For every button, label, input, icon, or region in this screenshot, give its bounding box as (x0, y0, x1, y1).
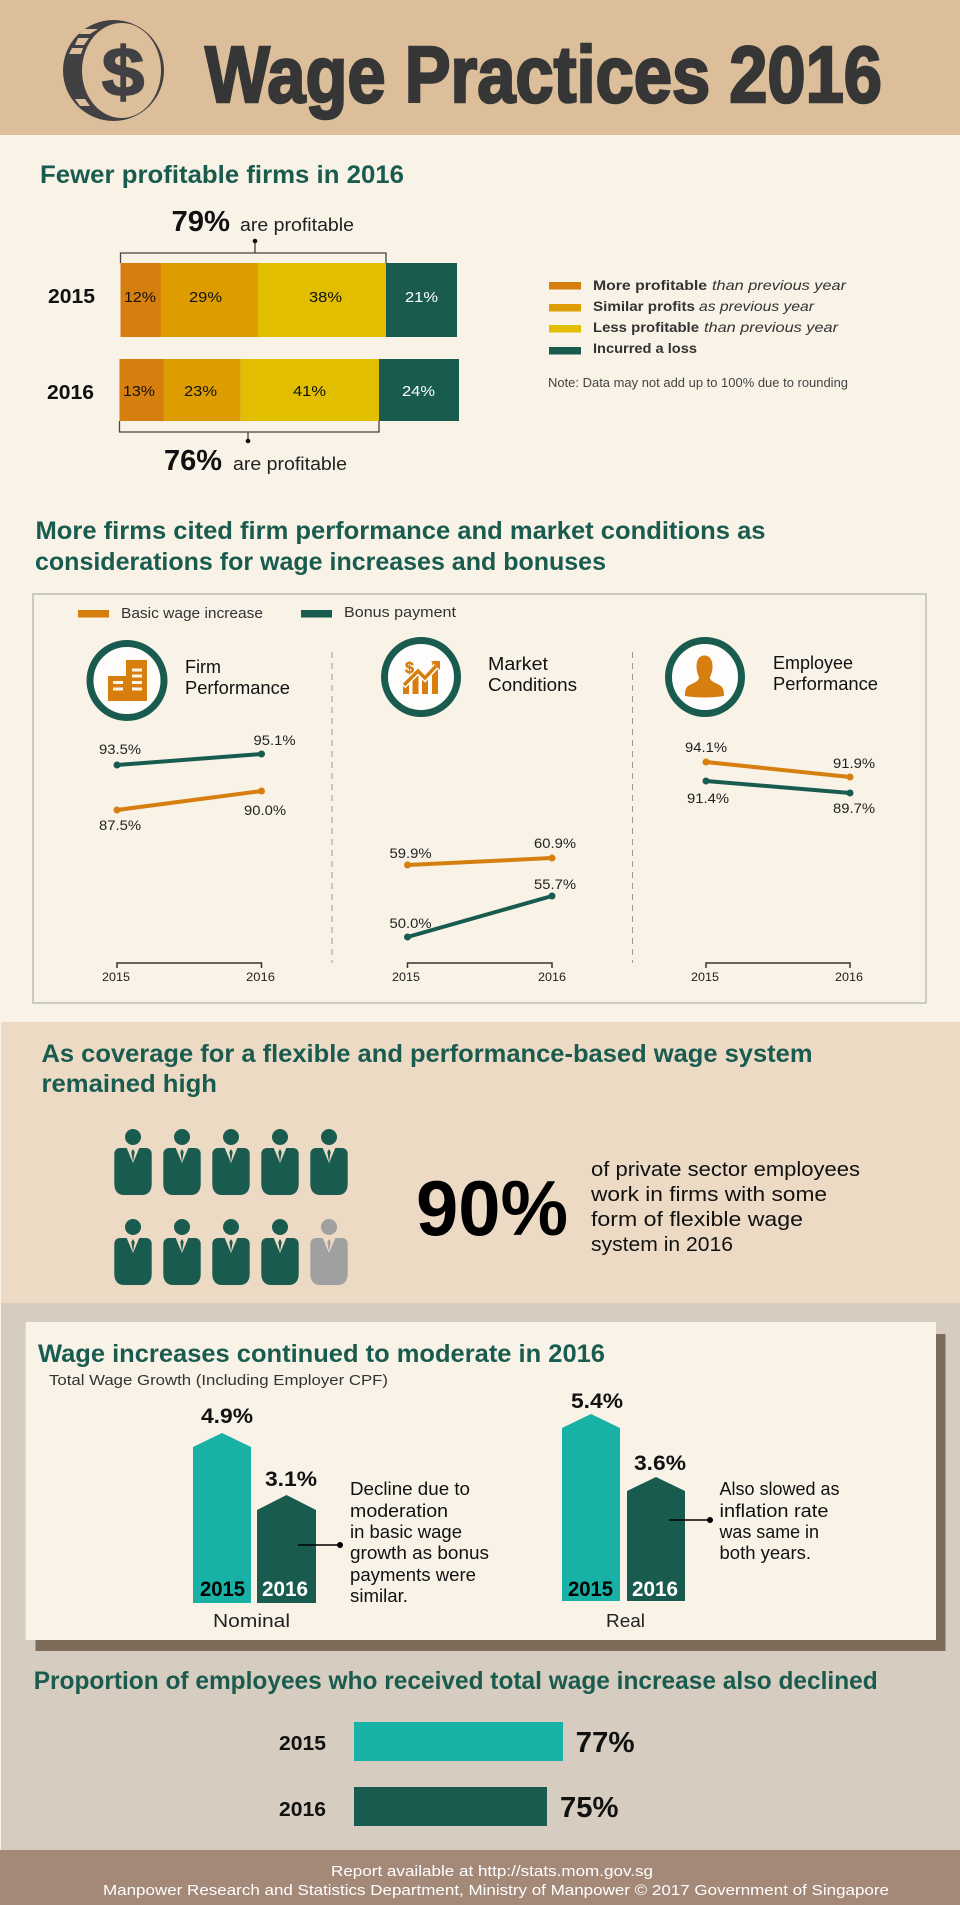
line chart: market conditions: 2015 (392, 970, 420, 984)
line chart: market conditions: 60.9% (534, 835, 576, 851)
icon: rising bar chart with dollar (384, 640, 458, 714)
heading: flexible wage coverage: remained high (42, 1070, 217, 1098)
chart: real wage growth: 2015 (568, 1578, 613, 1601)
heading: wage increases: Wage increases continued to moderate in 2016 (38, 1340, 605, 1368)
callout: real explanation: both years. (720, 1543, 811, 1563)
footer: Manpower Research and Statistics Department, Ministry of Manpower © 2017 Government of Singapore (103, 1882, 889, 1899)
sub-panel: firm performance (90, 644, 296, 984)
legend: profitability (549, 277, 848, 356)
sub-panel: employee performance: Employee (773, 653, 853, 673)
note: Note: Data may not add up to 100% due to rounding (548, 376, 848, 390)
text: 90% description: of private sector employees (591, 1158, 860, 1181)
chart: real wage growth: Real (606, 1611, 645, 1631)
footer: Report available at http://stats.mom.gov.sg (331, 1863, 653, 1880)
line chart: firm performance (99, 732, 296, 984)
legend: profitability: Incurred a loss (593, 340, 697, 356)
legend: lines: Basic wage increase (121, 605, 263, 622)
line chart: employee performance: 91.4% (687, 790, 729, 806)
text: 90% description: work in firms with some (590, 1183, 827, 1206)
text: 90% description (590, 1158, 860, 1256)
heading: flexible wage coverage (42, 1040, 812, 1098)
panel: wage increases (26, 1322, 945, 1651)
icon: person bust (668, 640, 742, 714)
bar 2016: 41% (293, 383, 326, 400)
callout: real explanation (669, 1479, 840, 1563)
sub-panel: employee performance (668, 640, 878, 984)
bar chart: proportion of employees: 2016 (279, 1799, 326, 1821)
chart: real wage growth: 3.6% (634, 1452, 686, 1475)
heading: wage considerations: considerations for wage increases and bonuses (35, 548, 606, 576)
chart: real wage growth: 2016 (632, 1578, 678, 1601)
legend: profitability: than previous year (704, 319, 840, 335)
legend: profitability: Less profitable (593, 319, 699, 335)
line chart: market conditions: 2016 (538, 970, 566, 984)
legend: profitability: More profitable (593, 277, 707, 293)
row label 2015: 2015 (48, 286, 95, 308)
bar chart: proportion of employees (279, 1722, 635, 1826)
callout: real explanation: inflation rate (720, 1501, 828, 1521)
callout: 79% profitable: 79% (172, 206, 230, 238)
line chart: employee performance: 89.7% (833, 800, 875, 816)
line chart: employee performance: 94.1% (685, 739, 727, 755)
callout: nominal explanation: similar. (350, 1586, 408, 1606)
callout: 79% profitable: are profitable (240, 215, 354, 235)
heading: flexible wage coverage: As coverage for a flexible and performance-based wage system (42, 1040, 812, 1068)
bar 2016: 13% (123, 383, 155, 400)
bar 2015: 29% (189, 289, 222, 306)
chart: nominal wage growth: 2016 (262, 1578, 308, 1601)
text: 90% description: system in 2016 (591, 1233, 733, 1256)
bar chart: proportion of employees: 77% (576, 1727, 635, 1759)
heading: proportion of employees: Proportion of employees who received total wage increase also declined (34, 1667, 878, 1695)
legend: profitability: as previous year (699, 298, 815, 314)
line chart: firm performance: 2015 (102, 970, 130, 984)
heading: wage considerations (35, 517, 766, 576)
legend: lines: Bonus payment (344, 604, 457, 621)
legend: lines (78, 604, 457, 622)
panel: wage considerations (33, 594, 926, 1003)
bar 2015 (120, 263, 457, 337)
line chart: employee performance (685, 739, 875, 984)
callout: nominal explanation: moderation (350, 1501, 448, 1521)
callout: real explanation: Also slowed as (720, 1479, 840, 1499)
callout: 76% profitable: are profitable (233, 454, 347, 474)
callout: 76% profitable (120, 421, 379, 477)
chart: real wage growth (562, 1390, 686, 1631)
bar chart: proportion of employees: 75% (560, 1792, 619, 1824)
chart: nominal wage growth: 4.9% (201, 1405, 253, 1428)
callout: 79% profitable (120, 206, 386, 263)
chart: profitability stacked bars (47, 206, 459, 477)
icon: dollar coin: $ (102, 32, 144, 111)
bar 2015: 12% (124, 289, 156, 306)
callout: 76% profitable: 76% (164, 445, 222, 477)
legend: profitability: than previous year (712, 277, 848, 293)
callout: nominal explanation: in basic wage (350, 1522, 462, 1542)
heading: wage considerations: More firms cited firm performance and market conditions as (36, 517, 766, 545)
sub-panel: market conditions: Market (488, 654, 548, 674)
line chart: firm performance: 90.0% (244, 802, 286, 818)
callout: nominal explanation: Decline due to (350, 1479, 470, 1499)
line chart: firm performance: 87.5% (99, 817, 141, 833)
chart: nominal wage growth: Nominal (213, 1611, 290, 1631)
footer (0, 1850, 960, 1905)
line chart: market conditions (390, 835, 576, 984)
bar chart: proportion of employees: 2015 (279, 1733, 326, 1755)
bar 2016: 24% (402, 383, 435, 400)
callout: nominal explanation (298, 1479, 489, 1606)
row label 2016: 2016 (47, 382, 94, 404)
header band (0, 0, 960, 135)
chart: nominal wage growth: 2015 (200, 1578, 245, 1601)
legend: profitability: Similar profits (593, 298, 695, 314)
sub-panel: firm performance: Performance (185, 678, 290, 698)
line chart: firm performance: 93.5% (99, 741, 141, 757)
line chart: employee performance: 2015 (691, 970, 719, 984)
line chart: firm performance: 95.1% (254, 732, 296, 748)
line chart: market conditions: 50.0% (390, 915, 432, 931)
text: 90% description: form of flexible wage (591, 1208, 803, 1231)
sub-panel: employee performance: Performance (773, 674, 878, 694)
pictogram: 9 of 10 employees (114, 1129, 348, 1285)
line chart: employee performance: 91.9% (833, 755, 875, 771)
stat: 90%: 90% (416, 1164, 568, 1252)
sub-panel: firm performance: Firm (185, 657, 221, 677)
icon: rising bar chart with dollar: $ (405, 660, 414, 677)
callout: real explanation: was same in (719, 1522, 819, 1542)
callout: nominal explanation: payments were (350, 1565, 476, 1585)
line chart: firm performance: 2016 (246, 970, 275, 984)
line chart: market conditions: 55.7% (534, 876, 576, 892)
bar 2015: 38% (309, 289, 342, 306)
chart: real wage growth: 5.4% (571, 1390, 623, 1413)
bar 2016 (120, 359, 459, 421)
subtitle: Total Wage Growth (Including Employer CPF) (49, 1372, 388, 1389)
chart: nominal wage growth: 3.1% (265, 1468, 317, 1491)
icon: dollar coin (63, 20, 164, 121)
line chart: employee performance: 2016 (835, 970, 863, 984)
bar 2015: 21% (405, 289, 438, 306)
sub-panel: market conditions: Conditions (488, 675, 577, 695)
bar 2016: 23% (184, 383, 217, 400)
callout: nominal explanation: growth as bonus (350, 1543, 489, 1563)
heading: fewer profitable firms: Fewer profitable firms in 2016 (40, 161, 404, 189)
sub-panel: market conditions (384, 640, 577, 984)
chart: nominal wage growth (193, 1405, 317, 1631)
icon: office building (90, 644, 164, 718)
line chart: market conditions: 59.9% (390, 845, 432, 861)
